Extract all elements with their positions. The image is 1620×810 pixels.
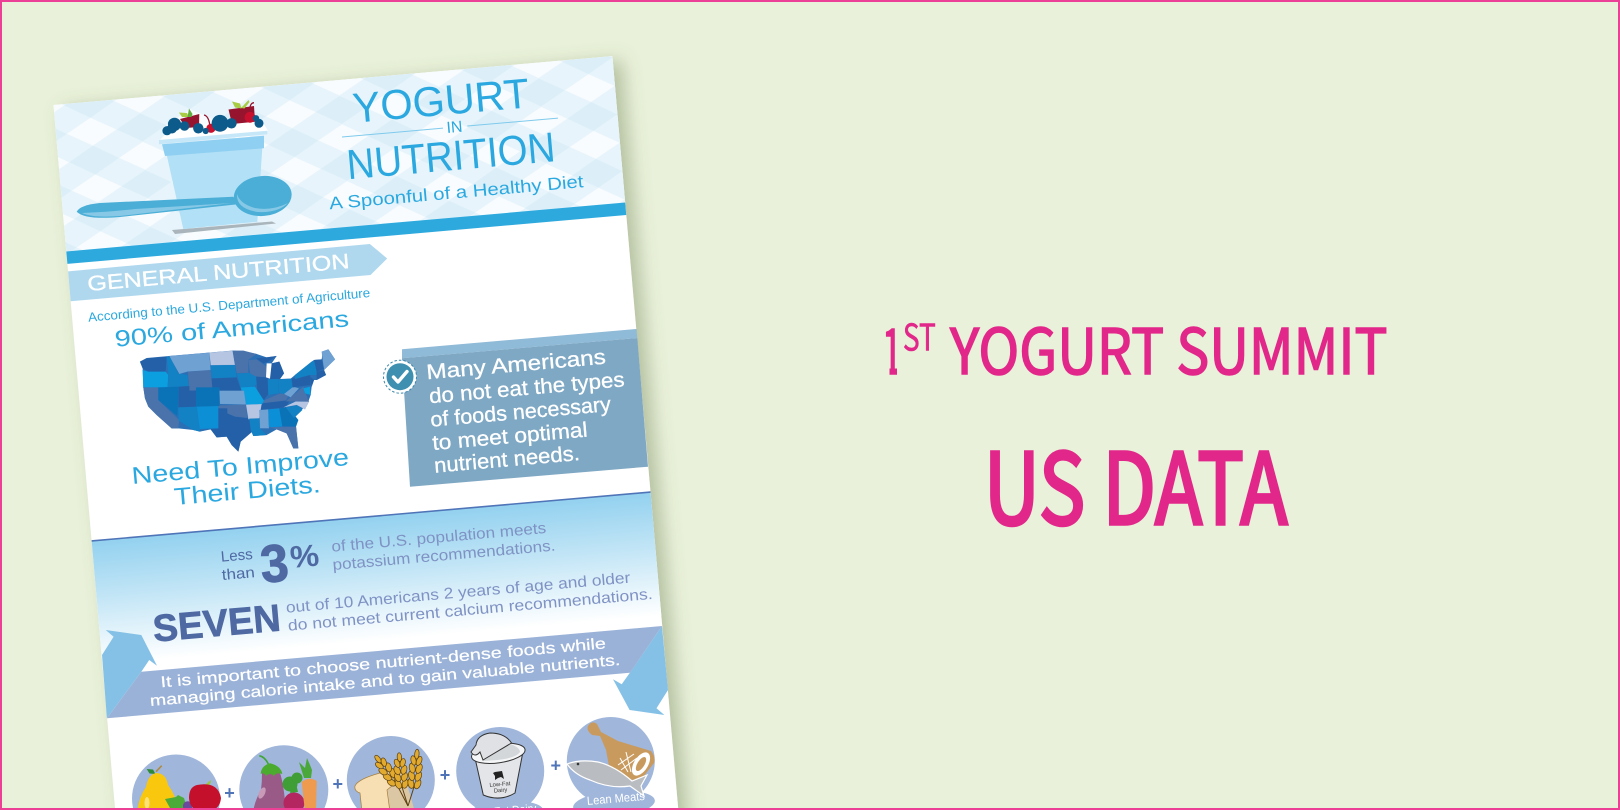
stat: less than 3%: 3	[258, 533, 291, 595]
header blue band	[66, 203, 626, 264]
subtitle: A Spoonful of a Healthy Diet	[328, 171, 584, 213]
stat: seven out of 10: do not meet current calcium recommendations.	[287, 586, 653, 635]
arrow: right down	[613, 626, 668, 715]
icon: ham	[588, 722, 655, 781]
headline: 90% of americans: 90% of Americans	[114, 305, 350, 352]
title line: 1st yogurt summit: ST	[903, 308, 936, 362]
divider under title word	[342, 118, 558, 137]
gradient section top rule	[92, 491, 651, 542]
cup body	[167, 148, 262, 229]
banner: managing calorie intake and to gain valuable nutrients.	[149, 652, 621, 710]
icon: cow	[493, 771, 504, 780]
icon: lean meats	[567, 717, 656, 810]
stat: less than 3%: of the U.S. population meets	[331, 520, 547, 556]
headline: their diets: Their Diets.	[173, 471, 322, 511]
title line: 1st yogurt summit: 1	[882, 302, 902, 393]
banner: It is important to choose nutrient-dense foods while	[160, 635, 607, 691]
title line: us data: US DATA	[984, 411, 1288, 553]
title line: 1st yogurt summit: YOGURT SUMMIT	[949, 302, 1388, 393]
header gingham pattern	[54, 56, 625, 252]
yogurt top	[160, 121, 268, 140]
cup shadow	[172, 222, 276, 234]
cup label: Dairy	[494, 787, 508, 795]
stat: less than 3%: Less	[220, 546, 253, 566]
tilted poster page	[54, 56, 679, 810]
callout text: nutrient needs.	[433, 442, 581, 478]
callout text: Many Americans	[425, 346, 607, 384]
stat: less than 3%: than	[221, 564, 256, 584]
icon: vegetables	[239, 745, 328, 810]
gradient section background	[92, 492, 661, 665]
stat: seven out of 10: out of 10 Americans 2 years of age and older	[285, 570, 631, 617]
stat: seven out of 10	[154, 572, 652, 642]
callout text: of foods necessary	[429, 393, 612, 432]
meat label: Lean Meats	[586, 789, 645, 808]
icon: yogurt cup with berries and spoon	[77, 100, 293, 234]
callout text: to meet optimal	[431, 419, 588, 455]
callout text	[428, 352, 624, 473]
banner	[107, 626, 662, 718]
states	[140, 349, 335, 452]
section ribbon: general nutrition	[68, 243, 388, 301]
title: yogurt: YOGURT	[351, 69, 531, 132]
stat: less than 3%: potassium recommendations.	[332, 538, 556, 574]
arrow: left up	[102, 630, 157, 718]
cup label	[489, 781, 511, 795]
icon: low-fat dairy cup	[456, 727, 544, 810]
icon: fruits	[132, 754, 221, 810]
lake michigan	[266, 363, 272, 379]
icon: grains	[347, 736, 435, 810]
cup label: Low-Fat	[489, 781, 511, 789]
chart: US state map	[140, 349, 335, 452]
headline: need to improve: Need To Improve	[131, 444, 350, 490]
title: nutrition: NUTRITION	[345, 123, 557, 188]
source line: According to the U.S. Department of Agriculture	[87, 285, 371, 325]
icon: check badge	[384, 360, 416, 393]
icon: fish	[567, 761, 647, 796]
plus: +	[224, 783, 235, 803]
callout panel	[384, 329, 648, 487]
callout text: do not eat the types	[428, 368, 625, 408]
plus: +	[440, 765, 450, 785]
stat: less than 3%	[222, 524, 554, 583]
plus: +	[550, 756, 561, 776]
cup rim	[159, 131, 267, 144]
map silhouette	[140, 349, 335, 452]
poster sheet	[54, 56, 679, 810]
plus: +	[333, 774, 343, 794]
berries	[162, 100, 264, 135]
stat: seven out of 10: SEVEN	[151, 598, 282, 651]
stat: less than 3%: %	[289, 538, 320, 575]
spoon	[77, 174, 293, 218]
title: in: IN	[446, 119, 463, 137]
section heading: GENERAL NUTRITION	[86, 250, 350, 296]
